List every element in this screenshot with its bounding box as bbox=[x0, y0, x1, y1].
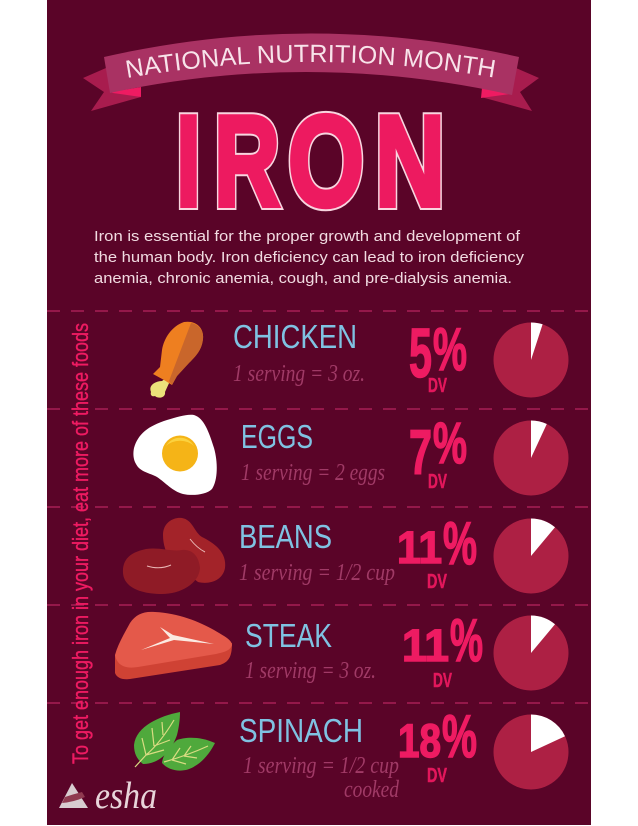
intro text: Iron is essential for the proper growth and development of bbox=[94, 228, 521, 245]
title: IRON: O bbox=[288, 90, 364, 234]
row: beans: 1 serving = 1/2 cup bbox=[239, 560, 395, 586]
value: % bbox=[433, 411, 467, 476]
value: % bbox=[450, 607, 483, 674]
intro text: anemia, chronic anemia, cough, and pre-dialysis anemia. bbox=[94, 270, 512, 287]
intro text bbox=[94, 228, 525, 287]
value: % bbox=[442, 703, 477, 770]
label: STEAK bbox=[245, 617, 332, 654]
row: beans: DV bbox=[427, 571, 447, 593]
pie chart 18 percent bbox=[494, 714, 568, 790]
row: eggs bbox=[133, 411, 568, 496]
row: beans bbox=[123, 510, 568, 594]
logo: esha: esha bbox=[95, 775, 157, 817]
value bbox=[409, 411, 467, 488]
pie chart 7 percent bbox=[494, 420, 568, 496]
title: IRON: N bbox=[375, 90, 445, 234]
side text: To get enough iron in your diet, eat more of these foods bbox=[68, 323, 93, 764]
row: spinach bbox=[134, 703, 568, 803]
value: 18 bbox=[398, 714, 441, 767]
value: 11 bbox=[402, 620, 449, 671]
title: IRON: R bbox=[214, 90, 280, 234]
label: EGGS bbox=[241, 418, 313, 455]
value bbox=[398, 703, 477, 770]
pie chart 11 percent bbox=[494, 518, 568, 594]
logo: esha bbox=[59, 775, 157, 817]
row: eggs: DV bbox=[428, 471, 447, 493]
value bbox=[402, 607, 483, 674]
row: chicken bbox=[150, 314, 568, 398]
label: SPINACH bbox=[239, 712, 363, 749]
icon: steak bbox=[115, 612, 232, 679]
row: steak bbox=[115, 607, 568, 692]
title: IRON: I bbox=[176, 90, 201, 234]
icon: fried egg bbox=[133, 415, 217, 495]
value: 5 bbox=[409, 314, 432, 392]
row: spinach: 1 serving = 1/2 cup bbox=[243, 753, 399, 779]
value: 11 bbox=[397, 522, 442, 573]
row: eggs: 1 serving = 2 eggs bbox=[241, 460, 385, 486]
icon: spinach leaves bbox=[134, 712, 215, 771]
row: steak: DV bbox=[433, 670, 452, 692]
banner: national nutrition month bbox=[83, 34, 539, 111]
title: IRON: I bbox=[176, 90, 201, 234]
value: 7 bbox=[409, 418, 432, 488]
value: % bbox=[443, 510, 477, 577]
pie chart 5 percent bbox=[494, 322, 568, 398]
label: BEANS bbox=[239, 518, 332, 555]
title: IRON: O bbox=[288, 90, 364, 234]
intro text: the human body. Iron deficiency can lead to iron deficiency bbox=[94, 249, 525, 266]
row: steak: 1 serving = 3 oz. bbox=[245, 658, 376, 684]
icon: kidney beans bbox=[123, 518, 225, 594]
title: IRON: R bbox=[214, 90, 280, 234]
row: chicken: DV bbox=[428, 375, 447, 397]
icon: chicken drumstick bbox=[150, 322, 203, 398]
title: IRON bbox=[176, 90, 445, 234]
value bbox=[409, 314, 467, 392]
row: spinach: cooked bbox=[344, 777, 400, 803]
value bbox=[397, 510, 477, 577]
value: % bbox=[433, 316, 467, 383]
row: spinach: DV bbox=[427, 765, 447, 787]
label: CHICKEN bbox=[233, 318, 357, 355]
row: chicken: 1 serving = 3 oz. bbox=[233, 361, 365, 387]
banner: national nutrition month: NATIONAL NUTRITION MONTH bbox=[126, 44, 495, 78]
pie chart 11 percent bbox=[494, 616, 568, 690]
title: IRON: N bbox=[375, 90, 445, 234]
